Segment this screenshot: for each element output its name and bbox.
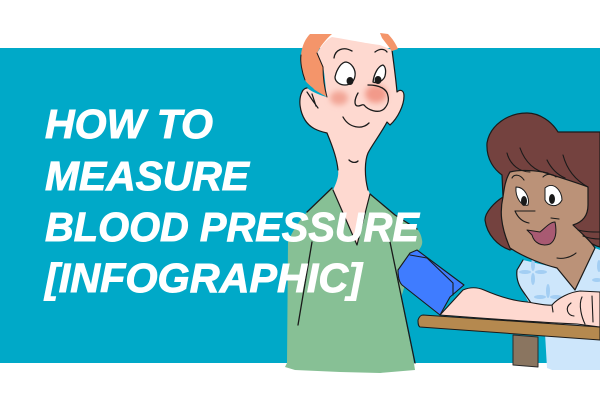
woman hair — [485, 113, 600, 250]
woman mouth — [527, 222, 556, 245]
man eyes and brows — [334, 49, 387, 85]
woman face — [501, 148, 600, 290]
title: MEASURE — [45, 153, 251, 199]
title: [INFOGRAPHIC] — [43, 255, 363, 301]
illustration: man — [285, 33, 422, 373]
man shirt — [285, 188, 422, 373]
illustration: woman — [398, 113, 600, 370]
woman dress — [517, 248, 600, 370]
table — [418, 315, 600, 340]
man nose and mouth — [343, 85, 388, 162]
man head and neck — [300, 37, 404, 245]
man hair — [301, 33, 398, 97]
man cheeks — [330, 85, 387, 105]
table leg — [513, 335, 538, 367]
title: HOW TO — [45, 101, 213, 147]
woman arm and hand — [440, 288, 600, 327]
title: BLOOD PRESSURE — [45, 204, 421, 250]
blood pressure cuff — [398, 250, 464, 315]
title — [43, 101, 421, 301]
teal banner — [0, 48, 600, 363]
